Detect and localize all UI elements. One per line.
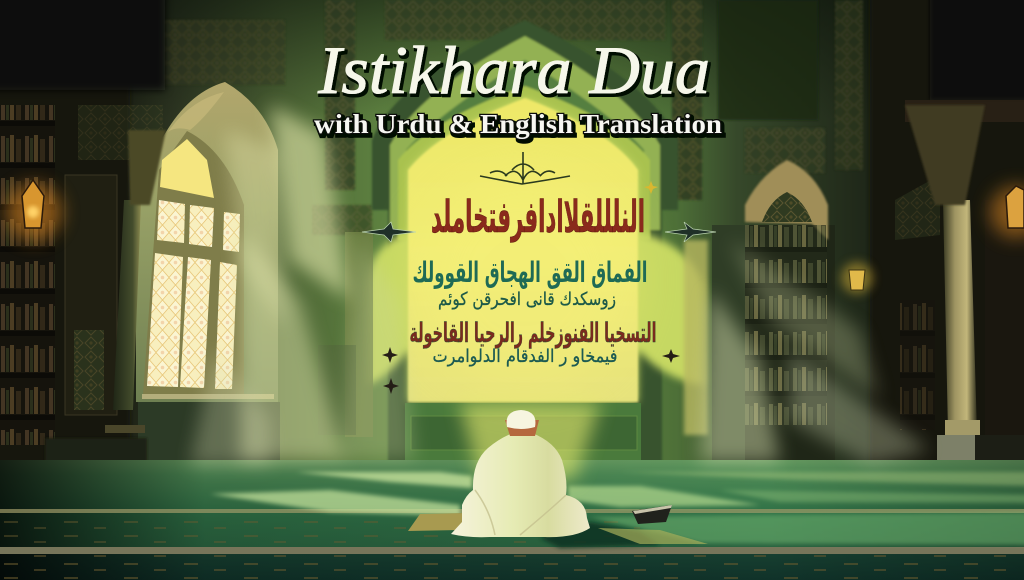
central green arch [372, 20, 678, 465]
floor carpet [0, 460, 1024, 580]
right column [905, 105, 1024, 482]
panel: dark right wall [870, 0, 1024, 482]
left window with stained glass [136, 82, 280, 465]
left column [45, 130, 166, 480]
head [505, 420, 539, 436]
subtitle: with Urdu & English Translation [314, 109, 722, 139]
arabic line 2: التسخيا الفنوزخلم رالرحيا القاخولة [410, 318, 656, 349]
star ornaments [362, 181, 716, 394]
right alcove bookshelf [712, 160, 835, 460]
arabic line 1: الفماق القق الهجاق القوولك [412, 256, 648, 289]
lantern: alcove [841, 262, 873, 294]
panel: upper wall ornament [165, 0, 863, 235]
light rays [190, 105, 930, 480]
lantern: right [990, 186, 1024, 238]
calligraphy panel glow [415, 170, 635, 390]
star: lower left 2 [383, 378, 399, 394]
star: right divider [665, 222, 716, 242]
glass panes [147, 139, 240, 389]
robe [451, 433, 590, 537]
prayer rug [408, 513, 465, 531]
panel: yellow calligraphy panel [367, 98, 703, 460]
star: lower left 1 [382, 347, 398, 363]
star: lower right [662, 349, 680, 363]
scene: mosque interior infographic: النلللقلاادافرفتخاملد [431, 192, 645, 243]
lit pillars flanking the panel [318, 232, 708, 437]
lantern: left [6, 180, 62, 240]
star: gold [644, 181, 658, 194]
lanterns [6, 180, 1024, 294]
cap [507, 410, 535, 429]
urdu line 1: زوسكدك قانى افحرقن كوئم [438, 289, 616, 310]
panel: dark left wall with bookshelves [0, 0, 165, 480]
star: left divider [362, 222, 416, 242]
urdu line 2: فيمخاو ر الفدقام الدلوامرت [432, 346, 618, 367]
open book on stand [632, 505, 672, 524]
sunlight patches [210, 472, 1024, 545]
figure: praying man [408, 410, 708, 548]
ornament: floral finial [480, 152, 570, 184]
title: Istikhara Dua [317, 32, 710, 108]
